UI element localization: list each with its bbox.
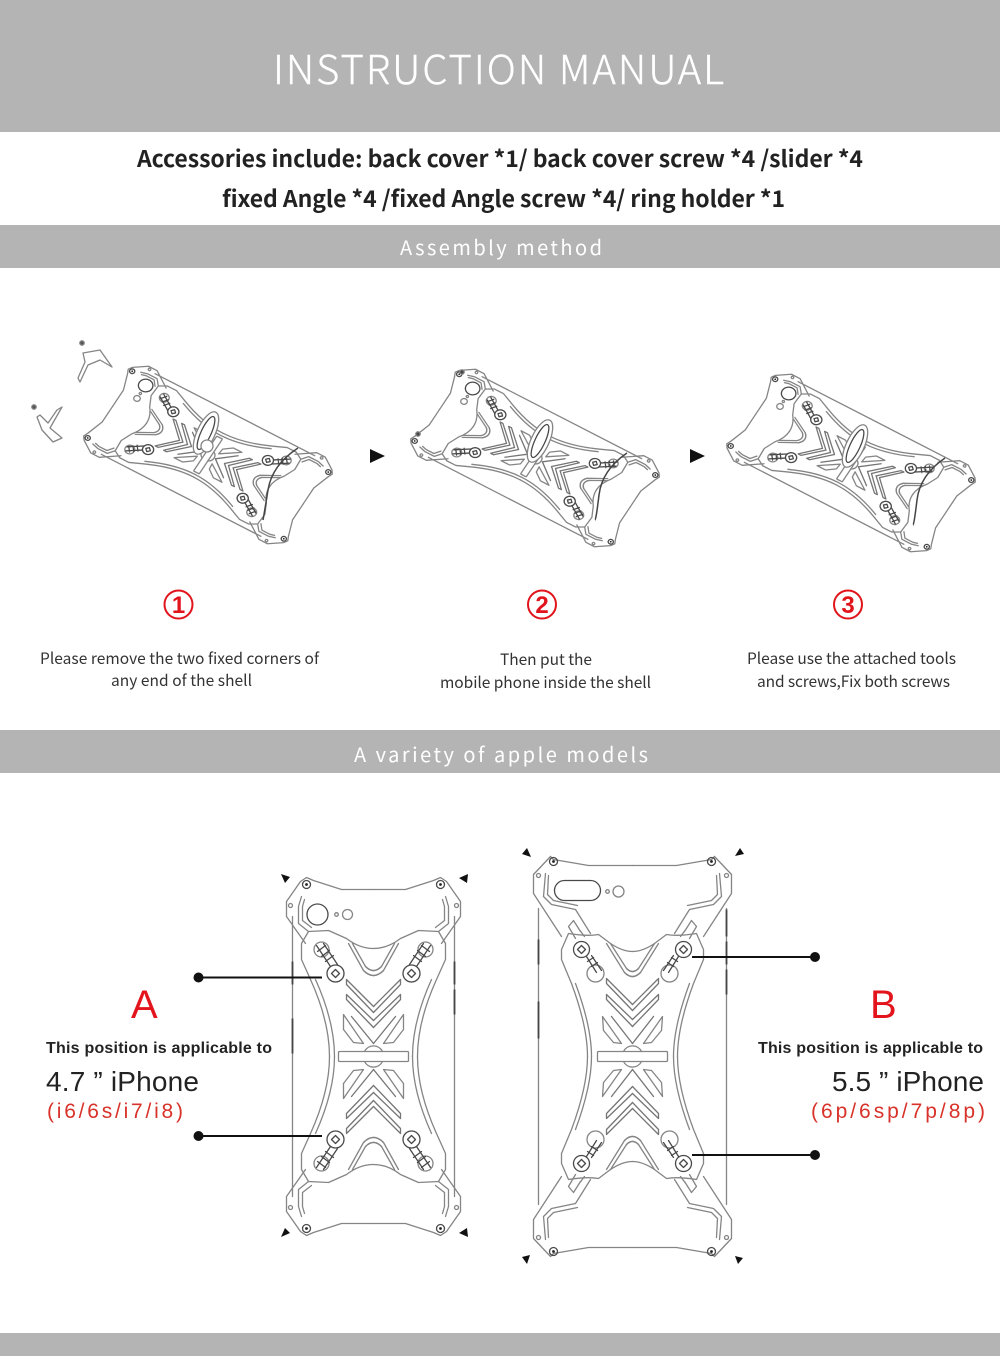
label: model A: (i6/6s/i7/i8) (47, 1100, 183, 1123)
diagram: 4.7 inch case (286, 878, 460, 1236)
pointer lines: model A (194, 972, 322, 1141)
arrow: step 1 to 2 (370, 449, 385, 463)
side buttons (292, 962, 454, 1054)
section band: assembly method (0, 225, 1000, 268)
step 2 caption: mobile phone inside the shell (440, 671, 651, 693)
step 3 caption (747, 647, 956, 692)
label: model B (758, 983, 985, 1123)
label: model B: (6p/6sp/7p/8p) (811, 1100, 985, 1123)
section band: assembly method: Assembly method (400, 232, 602, 261)
label: model A: This position is applicable to (46, 1040, 272, 1057)
label: model B: This position is applicable to (758, 1040, 983, 1057)
end cut-out outline (263, 448, 298, 520)
corner arrows: 5.5 inch case (522, 848, 744, 1264)
camera cutout (307, 904, 352, 925)
step 3 caption: Please use the attached tools (747, 647, 956, 669)
section band: apple models (0, 730, 1000, 773)
title banner (0, 0, 1000, 132)
pointer lines: model B (692, 952, 820, 1160)
label: model B: B (870, 983, 897, 1027)
step 2 illustration (404, 362, 666, 554)
step 2 caption (440, 648, 651, 693)
step 1 caption (40, 647, 320, 691)
step number 2: 2 (535, 592, 549, 619)
arrow: step 2 to 3 (690, 449, 705, 463)
label: model A: 4.7 ” iPhone (46, 1066, 199, 1097)
step 3 caption: and screws,Fix both screws (757, 670, 950, 692)
dual camera cutout (554, 880, 624, 900)
corner arrows: 4.7 inch case (281, 874, 468, 1237)
step number 2 (528, 590, 556, 619)
step number 3: 3 (841, 592, 855, 619)
label: model A: A (131, 983, 158, 1027)
accessories text: Accessories include: back cover *1/ back cover screw *4 /slider *4 (136, 140, 863, 174)
step 1 caption: Please remove the two fixed corners of (40, 647, 320, 669)
ring holder (188, 408, 224, 458)
step 1 illustration: case with detached corners (32, 341, 339, 551)
title banner: INSTRUCTION MANUAL (273, 38, 724, 96)
accessories text: fixed Angle *4 /fixed Angle screw *4/ ring holder *1 (222, 180, 785, 214)
diagram: 5.5 inch case (534, 856, 732, 1256)
side buttons (538, 910, 726, 1038)
step number 1 (164, 590, 192, 619)
step number 3 (834, 590, 862, 619)
step 3 illustration (720, 367, 982, 559)
label: model A (46, 983, 272, 1123)
section band: apple models: A variety of apple models (354, 739, 648, 768)
accessories text (136, 140, 863, 214)
detached corner pieces (32, 341, 112, 442)
step 2 caption: Then put the (500, 648, 592, 670)
label: model B: 5.5 ” iPhone (832, 1066, 984, 1097)
step number 1: 1 (172, 592, 185, 619)
bottom band (0, 1333, 1000, 1356)
step 1 caption: any end of the shell (111, 669, 252, 691)
